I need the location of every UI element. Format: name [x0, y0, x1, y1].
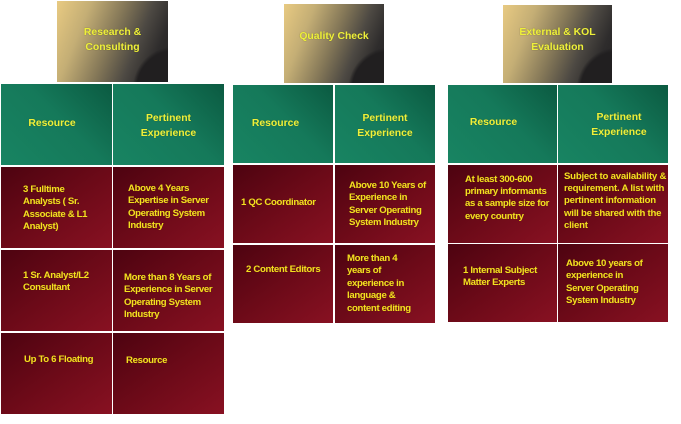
cell: subject matter experts: 1 Internal Subject: [463, 265, 537, 276]
heading: External & KOL Evaluation: [503, 5, 612, 83]
column header: Pertinent Experience: [558, 85, 668, 163]
cell: subject matter experts: Matter Experts: [463, 277, 525, 288]
cell: more than 8 years: Operating System: [124, 297, 201, 308]
cell: analysts: Associate & L1: [23, 209, 87, 220]
column header: Resource: Resource: [28, 118, 76, 129]
column header: Resource: [448, 85, 557, 163]
column header: Pertinent Experience: Experience: [141, 128, 196, 139]
column header: Pertinent Experience: Experience: [357, 128, 413, 139]
cell: resource: [113, 333, 224, 414]
column header: Pertinent Experience: [113, 84, 224, 165]
cell: primary informants: [448, 164, 557, 242]
cell: more than 4 years: language &: [347, 290, 395, 301]
column header: Pertinent Experience: Pertinent: [146, 113, 191, 124]
column header: Pertinent Experience: Experience: [591, 127, 647, 138]
cell: analysts: Analyst): [23, 221, 58, 232]
cell: above 4 years: Expertise in Server: [128, 195, 209, 206]
cell: primary informants: every country: [465, 211, 524, 222]
cell: availability: client: [564, 220, 588, 231]
heading: Research & Consulting: [57, 1, 168, 82]
cell: primary informants: At least 300-600: [465, 174, 532, 184]
heading: External & KOL Evaluation: Evaluation: [531, 42, 584, 53]
cell: above 10 years: Server Operating: [349, 205, 422, 216]
cell: more than 4 years: More than 4: [347, 253, 397, 264]
cell: above 10 years: System Industry: [349, 217, 419, 228]
cell: more than 8 years: More than 8 Years of: [124, 272, 211, 283]
column header: Pertinent Experience: Pertinent: [596, 112, 642, 123]
cell: above 10 years: System Industry: [566, 295, 636, 306]
column header: Resource: Resource: [252, 118, 299, 129]
cell: senior analyst: 1 Sr. Analyst/L2: [23, 270, 89, 281]
cell: above 10 years: [335, 165, 435, 243]
cell: availability: pertinent information: [564, 195, 656, 206]
panel: Quality Check: [233, 4, 435, 323]
column header: Resource: Resource: [470, 117, 517, 128]
cell: more than 4 years: content editing: [347, 303, 411, 314]
column header: Resource: [1, 84, 112, 165]
cell: more than 4 years: experience in: [347, 278, 404, 289]
cell: availability: will be shared with the: [564, 208, 661, 219]
cell: more than 8 years: Industry: [124, 309, 159, 320]
cell: above 10 years: Above 10 years of: [566, 258, 643, 269]
cell: floating: [1, 333, 112, 414]
cell: above 10 years: [558, 244, 668, 322]
cell: above 4 years: Above 4 Years: [128, 183, 189, 194]
cell: more than 8 years: [113, 250, 224, 331]
heading: Quality Check: [284, 4, 384, 83]
heading: Research & Consulting: Consulting: [85, 42, 140, 53]
cell: above 10 years: Above 10 Years of: [349, 180, 426, 191]
cell: primary informants: primary informants: [465, 186, 546, 197]
cell: primary informants: as a sample size for: [465, 198, 549, 209]
heading: Quality Check: Quality Check: [299, 31, 369, 42]
column header: Resource: [233, 85, 333, 163]
cell: content editors: [233, 245, 333, 323]
cell: QC coordinator: [233, 165, 333, 243]
cell: above 4 years: Industry: [128, 220, 163, 231]
cell: analysts: Analysts ( Sr.: [23, 196, 79, 207]
cell: content editors: 2 Content Editors: [246, 264, 320, 275]
cell: above 10 years: Experience in: [349, 192, 407, 203]
cell: senior analyst: Consultant: [23, 282, 70, 293]
cell: resource: Resource: [126, 355, 167, 366]
cell: subject matter experts: [448, 244, 557, 322]
cell: availability: requirement. A list with: [564, 183, 664, 194]
cell: analysts: 3 Fulltime: [23, 184, 64, 195]
cell: more than 8 years: Experience in Server: [124, 284, 212, 295]
heading: External & KOL Evaluation: External & KOL: [519, 27, 596, 38]
cell: availability: Subject to availability &: [564, 170, 666, 182]
cell: availability: [558, 164, 668, 242]
cell: more than 4 years: [335, 245, 435, 323]
cell: above 10 years: experience in: [566, 270, 623, 281]
panel: Research & Consulting: [1, 1, 224, 414]
cell: above 4 years: [113, 167, 224, 248]
cell: senior analyst: [1, 250, 112, 331]
cell: above 4 years: Operating System: [128, 208, 205, 219]
heading: Research & Consulting: Research &: [84, 27, 141, 38]
panel: External & KOL Evaluation: [448, 5, 668, 322]
column header: Pertinent Experience: Pertinent: [362, 113, 408, 124]
cell: above 10 years: Server Operating: [566, 283, 639, 294]
cell: floating: Up To 6 Floating: [24, 354, 93, 365]
cell: analysts: [1, 167, 112, 248]
column header: Pertinent Experience: [335, 85, 435, 163]
cell: more than 4 years: years of: [347, 265, 381, 276]
cell: QC coordinator: 1 QC Coordinator: [241, 197, 316, 208]
